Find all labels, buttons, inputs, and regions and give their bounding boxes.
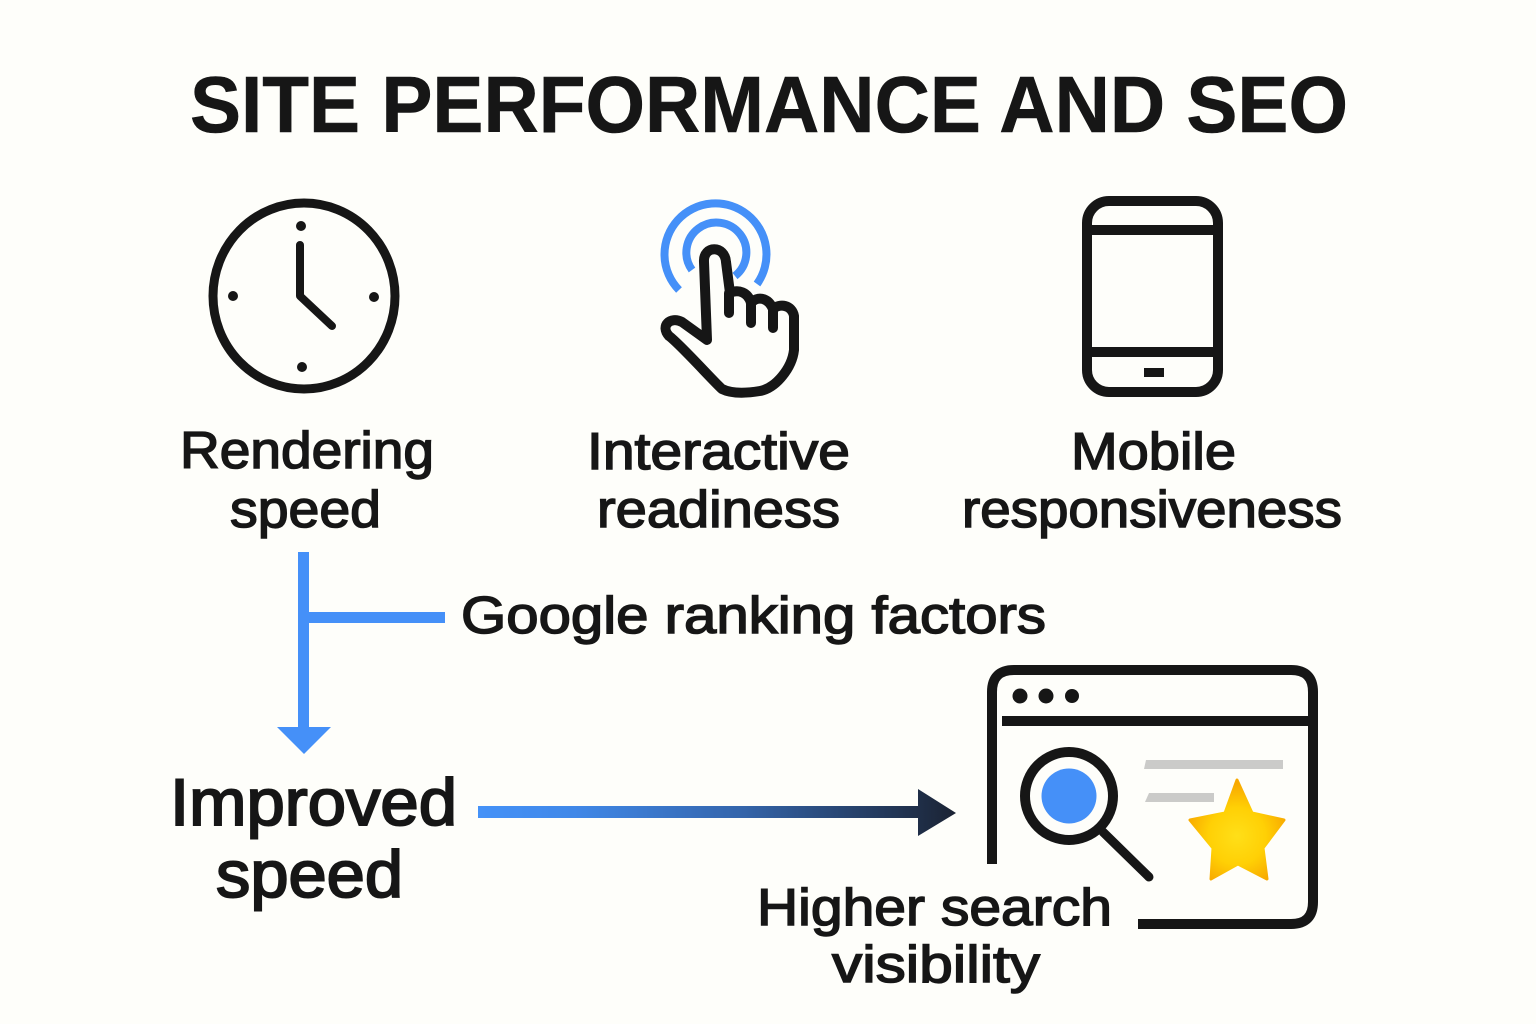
icon: tapping hand (664, 203, 794, 393)
magnifying glass (1025, 752, 1149, 877)
label: higher search visibility: Higher search (757, 879, 1112, 937)
label: mobile responsiveness (962, 423, 1342, 539)
panel: interactive readiness (587, 203, 850, 539)
label: interactive readiness (587, 423, 850, 539)
label: improved speed: Improved (170, 765, 457, 839)
label: google ranking factors: Google ranking factors (461, 587, 1046, 645)
icon: mobile phone (1087, 201, 1218, 392)
browser dots (1012, 688, 1079, 704)
label: rendering speed: Rendering (180, 422, 434, 480)
icon: clock (213, 203, 395, 389)
label: higher search visibility (757, 879, 1112, 994)
label: rendering speed: speed (230, 481, 381, 539)
label: improved speed (170, 765, 457, 911)
panel: rendering speed (180, 203, 434, 539)
label: mobile responsiveness: responsiveness (962, 481, 1342, 539)
star (1190, 780, 1284, 879)
label: interactive readiness: readiness (597, 481, 840, 539)
label: higher search visibility: visibility (832, 936, 1040, 994)
browser frame (992, 670, 1313, 924)
label: interactive readiness: Interactive (587, 423, 850, 481)
result lines (1144, 760, 1283, 802)
panel: mobile responsiveness (962, 201, 1342, 539)
label: improved speed: speed (216, 837, 403, 911)
label: mobile responsiveness: Mobile (1071, 423, 1236, 481)
arrow: gradient arrow to search visibility (478, 789, 956, 836)
arrow: blue down arrow with ranking factor branch (277, 552, 445, 754)
icon: browser window with search (992, 670, 1313, 924)
label: rendering speed (180, 422, 434, 539)
title: SITE PERFORMANCE AND SEO (190, 60, 1348, 149)
browser header bar (1002, 716, 1309, 726)
